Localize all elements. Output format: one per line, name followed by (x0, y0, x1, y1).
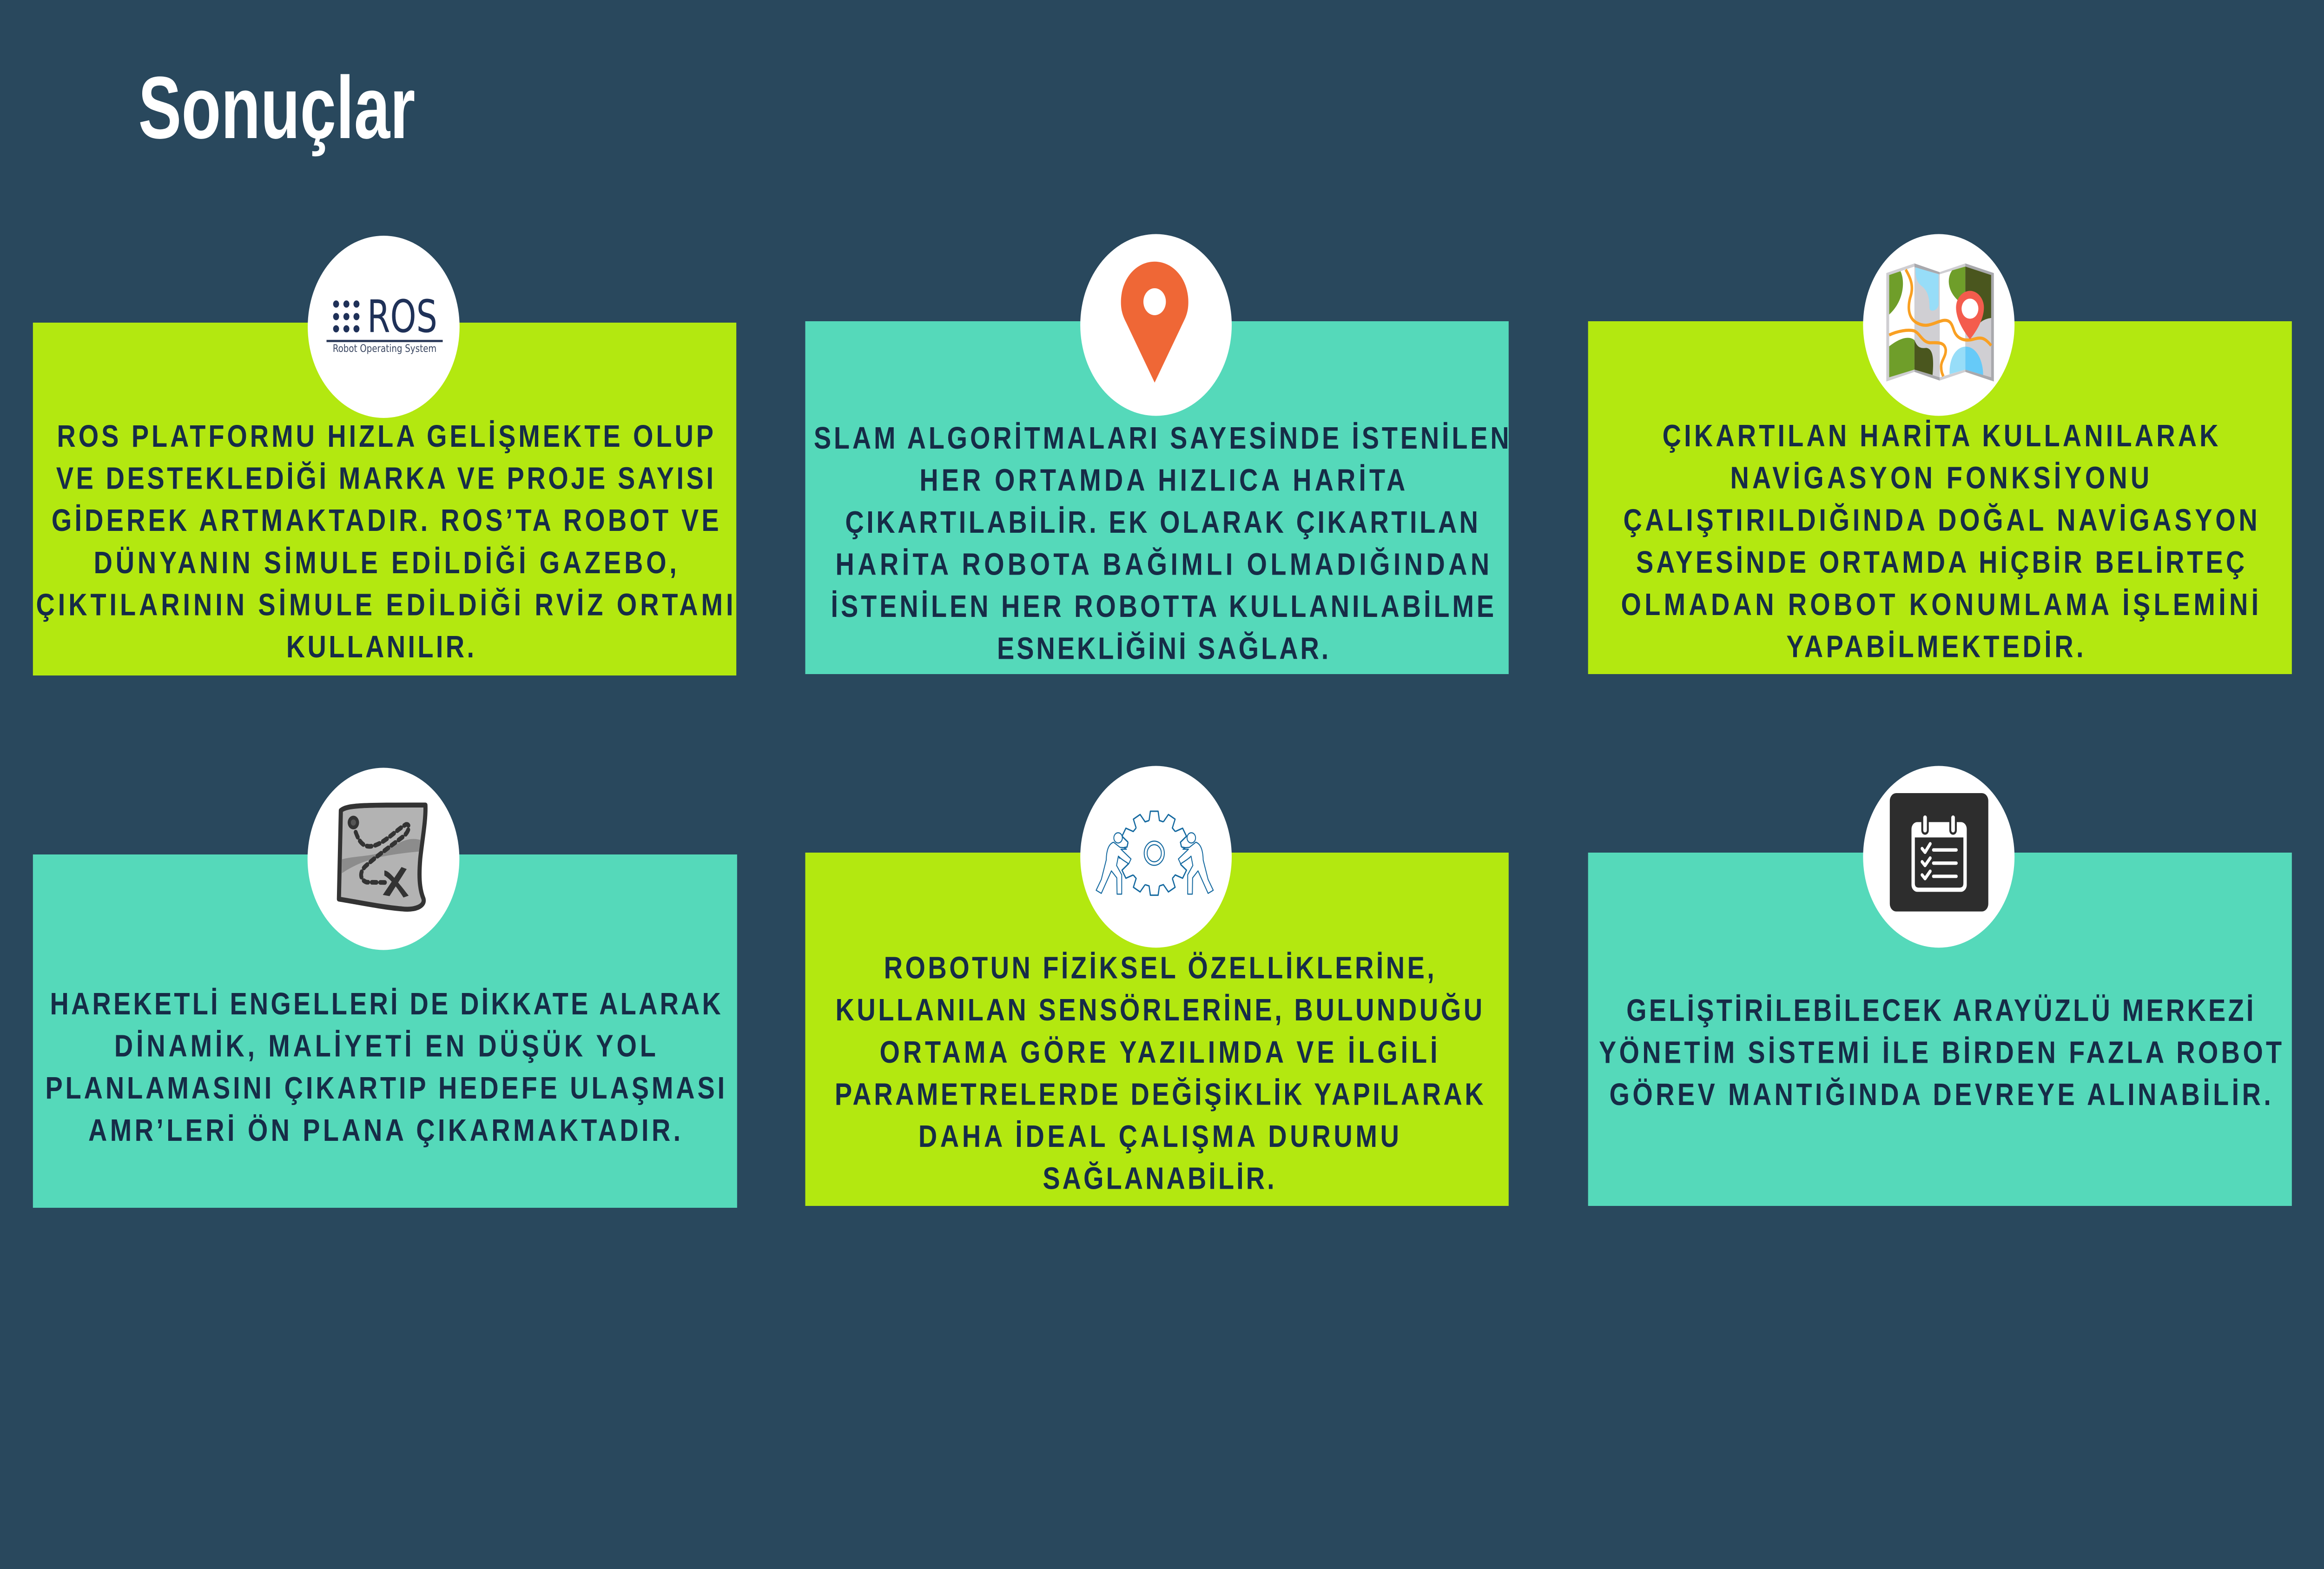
text block: robot parameters: ORTAMA GÖRE YAZILIMDA VE İLGİLİ (879, 1035, 1437, 1070)
icon: ROS logo (308, 236, 460, 418)
text block: navigation: ÇIKARTILAN HARİTA KULLANILARAK (1663, 418, 2218, 453)
text block: robot parameters: ROBOTUN FİZİKSEL ÖZELLİKLERİNE, (884, 951, 1434, 986)
text block: robot parameters (835, 951, 1484, 1196)
text block: robot parameters: SAĞLANABİLİR. (1043, 1161, 1274, 1196)
text block: SLAM algorithms: HER ORTAMDA HIZLICA HARİTA (919, 463, 1405, 498)
panel background: teal (1588, 853, 2292, 1206)
text block: navigation (1621, 418, 2258, 664)
text block: central management: YÖNETİM SİSTEMİ İLE BİRDEN FAZLA ROBOT (1599, 1035, 2282, 1070)
panel background: teal (805, 321, 1509, 674)
text block: navigation: ÇALIŞTIRILDIĞINDA DOĞAL NAVİGASYON (1623, 503, 2258, 538)
panel background: lime (1588, 321, 2292, 674)
text block: SLAM algorithms: HARİTA ROBOTA BAĞIMLI OLMADIĞINDAN (836, 547, 1489, 582)
icon: folded map (1863, 234, 2014, 416)
text block: robot parameters: KULLANILAN SENSÖRLERİNE, BULUNDUĞU (836, 993, 1482, 1027)
text block: robot parameters: DAHA İDEAL ÇALIŞMA DURUMU (918, 1119, 1399, 1154)
panel: robot parameters (805, 766, 1509, 1206)
text block: path planning: AMR’LERİ ÖN PLANA ÇIKARMAKTADIR. (88, 1113, 680, 1148)
panel: ROS platform (33, 236, 736, 675)
text block: path planning: DİNAMİK, MALİYETİ EN DÜŞÜK YOL (114, 1029, 656, 1064)
text block: ROS platform: ROS PLATFORMU HIZLA GELİŞMEKTE OLUP (57, 419, 713, 454)
text block: ROS platform: DÜNYANIN SİMULE EDİLDİĞİ GAZEBO, (94, 545, 677, 580)
panel: central management (1588, 766, 2292, 1206)
text block: SLAM algorithms: ESNEKLİĞİNİ SAĞLAR. (997, 631, 1328, 666)
text block: navigation: OLMADAN ROBOT KONUMLAMA İŞLEMİNİ (1621, 587, 2258, 622)
text block: path planning: PLANLAMASINI ÇIKARTIP HEDEFE ULAŞMASI (46, 1071, 725, 1106)
text block: robot parameters: PARAMETRELERDE DEĞİŞİKLİK YAPILARAK (835, 1077, 1484, 1112)
text block: ROS platform: KULLANILIR. (286, 629, 474, 664)
panel: SLAM algorithms (805, 234, 1509, 674)
panel: dynamic path planning (33, 768, 737, 1208)
panel: navigation (1588, 234, 2292, 674)
icon: checklist (1863, 766, 2014, 947)
text block: SLAM algorithms (814, 421, 1509, 666)
text block: SLAM algorithms: İSTENİLEN HER ROBOTTA KULLANILABİLME (831, 589, 1494, 624)
text block: path planning (46, 986, 725, 1148)
text block: ROS platform: VE DESTEKLEDİĞİ MARKA VE PROJE SAYISI (56, 461, 713, 496)
panel background: lime (805, 853, 1509, 1206)
panel background: lime (33, 323, 736, 675)
icon: ROS logo: Robot Operating System (333, 342, 436, 354)
icon: people turning a gear (1080, 766, 1232, 947)
text block: central management (1599, 993, 2282, 1112)
text block: central management: GELİŞTİRİLEBİLECEK ARAYÜZLÜ MERKEZİ (1626, 993, 2253, 1028)
text block: navigation: SAYESİNDE ORTAMDA HİÇBİR BELİRTEÇ (1636, 545, 2245, 580)
text block: central management: GÖREV MANTIĞINDA DEVREYE ALINABİLİR. (1609, 1077, 2271, 1112)
icon: location pin (1080, 234, 1232, 416)
icon: ROS logo: ROS (367, 291, 437, 343)
text block: navigation: YAPABİLMEKTEDİR. (1786, 629, 2083, 664)
text block: ROS platform (36, 419, 733, 664)
title: Sonuçlar (139, 59, 415, 157)
text block: path planning: HAREKETLİ ENGELLERİ DE DİKKATE ALARAK (50, 986, 721, 1021)
text block: SLAM algorithms: ÇIKARTILABİLİR. EK OLARAK ÇIKARTILAN (845, 505, 1478, 540)
text block: ROS platform: ÇIKTILARININ SİMULE EDİLDİĞİ RVİZ ORTAMI (36, 588, 733, 622)
icon: route map (308, 768, 459, 950)
panel background: teal (33, 854, 737, 1208)
text block: navigation: NAVİGASYON FONKSİYONU (1730, 461, 2149, 496)
text block: ROS platform: GİDEREK ARTMAKTADIR. ROS’TA ROBOT VE (52, 503, 719, 538)
text block: SLAM algorithms: SLAM ALGORİTMALARI SAYESİNDE İSTENİLEN (814, 421, 1509, 456)
